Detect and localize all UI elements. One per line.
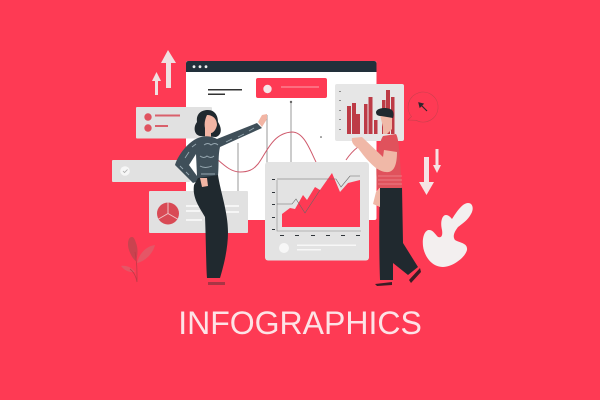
browser window [186,61,376,220]
gap between arm and torso [189,154,197,176]
cursor speech bubble icon [408,92,438,122]
up arrows [152,50,176,95]
line chart panel [265,162,369,260]
hand on hip [200,178,208,187]
bar chart panel [335,84,404,141]
raised hand [258,114,267,127]
sweater [175,123,262,183]
title: INFOGRAPHICS [178,305,422,341]
shirt [376,134,402,188]
face [205,115,217,139]
left hand hip [373,187,380,207]
arm [352,137,397,172]
hair [376,108,394,118]
shoes [208,282,225,285]
plant left [121,237,155,282]
woman figure [175,110,267,285]
red pill banner [256,78,327,98]
check panel [112,160,190,182]
hair [195,110,221,137]
down arrows [419,149,441,195]
man figure [352,108,421,286]
white leaf [423,203,473,267]
shirt stripes [378,176,402,184]
list panel [136,107,212,138]
sweater pattern [180,128,254,175]
shoes [375,268,421,286]
trousers [194,175,228,278]
legs [379,187,418,280]
wave line [218,132,358,172]
pie chart panel [149,191,248,233]
head [380,115,392,134]
